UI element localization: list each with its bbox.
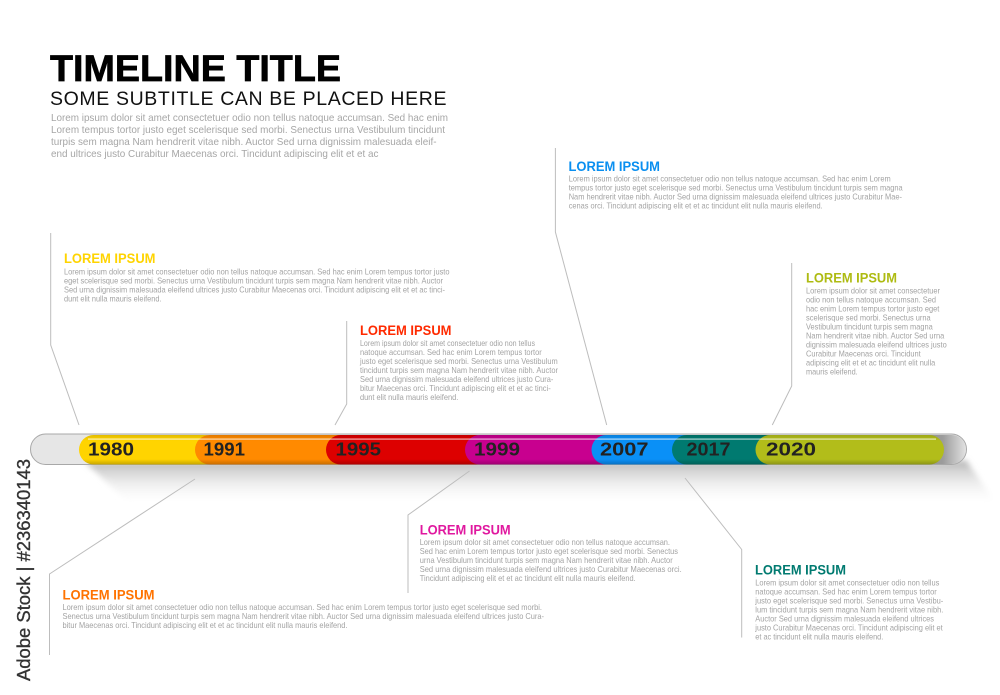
text panel: 1995 xyxy=(359,323,558,402)
text panel: 1995: tincidunt turpis sem magna Nam hendrerit vitae nibh. Auctor xyxy=(360,365,558,375)
text panel: 2020: hac enim Lorem tempus tortor justo eget xyxy=(806,304,940,314)
text panel: 1999: urna Vestibulum tincidunt turpis sem magna Nam hendrerit vitae nibh. Auctor xyxy=(420,555,673,565)
year: 1991: 1991 xyxy=(204,439,245,460)
year: 1999: 1999 xyxy=(474,439,520,460)
text panel: 2007: tempus tortor justo eget scelerisque sed morbi. Senectus urna Vestibulum tincidunt turpis sem magna xyxy=(569,183,903,193)
text panel: 1980: Sed urna dignissim malesuada eleifend ultrices justo Curabitur Maecenas orci. Tincidunt adipiscing elit et et ac tinci- xyxy=(64,284,445,294)
text panel: 2020 xyxy=(806,271,947,377)
connector: 1980 xyxy=(51,233,79,425)
text panel: 2017: et ac tincidunt elit nulla mauris eleifend. xyxy=(755,631,883,641)
text panel: 1980: eget scelerisque sed morbi. Senectus urna Vestibulum tincidunt turpis sem magna Nam hendrerit vitae nibh. Auctor xyxy=(64,275,443,285)
text panel: 2020: Nam hendrerit vitae nibh. Auctor Sed urna xyxy=(806,331,945,341)
connector: 2007 xyxy=(555,148,607,425)
text panel: 1999: Sed hac enim Lorem tempus tortor justo eget scelerisque sed morbi. Senectus xyxy=(420,546,678,556)
bar track xyxy=(30,434,966,464)
text panel: 1991: bitur Maecenas orci. Tincidunt adipiscing elit et et ac tincidunt elit nulla mauris eleifend. xyxy=(62,620,348,630)
text panel: 1995: dunt elit nulla mauris eleifend. xyxy=(360,392,458,402)
text panel: 1995: bitur Maecenas orci. Tincidunt adipiscing elit et et ac tinci- xyxy=(360,383,551,393)
segment: 2017 xyxy=(672,435,782,464)
bar end shading xyxy=(920,435,966,464)
text panel: 1980: LOREM IPSUM xyxy=(64,251,156,266)
segment: 2020 xyxy=(756,435,944,464)
title: TIMELINE TITLE xyxy=(50,47,341,89)
bar highlight xyxy=(88,438,936,440)
text panel: 2007: Nam hendrerit vitae nibh. Auctor Sed urna dignissim malesuada eleifend ultrices justo Curabitur Mae- xyxy=(569,192,902,202)
text panel: 1980: dunt elit nulla mauris eleifend. xyxy=(64,293,162,303)
text panel: 1995: natoque accumsan. Sed hac enim Lorem tempus tortor xyxy=(360,347,542,357)
connector: 1995 xyxy=(335,321,347,425)
timeline shadow xyxy=(85,460,995,502)
connector: 2020 xyxy=(772,263,792,425)
timeline bar xyxy=(30,434,966,464)
text panel: 2017: Auctor Sed urna dignissim malesuada eleifend ultrices xyxy=(755,613,934,623)
year: 1980: 1980 xyxy=(88,439,134,460)
text panel: 2007 xyxy=(568,159,903,211)
bar gloss xyxy=(79,435,944,464)
text panel: 1999 xyxy=(420,522,682,583)
text panel: 2017: justo eget scelerisque sed morbi. Senectus urna Vestibu- xyxy=(754,595,943,605)
text panel: 1980: Lorem ipsum dolor sit amet consectetuer odio non tellus natoque accumsan. Sed hac enim Lorem tempus tortor justo xyxy=(64,266,450,276)
text panel: 1999: Sed urna dignissim malesuada eleifend ultrices justo Curabitur Maecenas orci. xyxy=(420,564,682,574)
intro text block xyxy=(51,113,448,160)
text panel: 2020: Lorem ipsum dolor sit amet consectetuer xyxy=(806,286,940,296)
intro text block: turpis sem magna Nam hendrerit vitae nibh. Auctor Sed urna dignissim malesuada eleif- xyxy=(51,137,436,148)
text panel: 2007: Lorem ipsum dolor sit amet consectetuer odio non tellus natoque accumsan. Sed hac enim Lorem xyxy=(569,174,891,184)
text panel: 2017: justo Curabitur Maecenas orci. Tincidunt adipiscing elit et xyxy=(754,622,943,632)
subtitle: SOME SUBTITLE CAN BE PLACED HERE xyxy=(50,88,446,110)
text panel: 2017: natoque accumsan. Sed hac enim Lorem tempus tortor xyxy=(755,586,937,596)
text panel: 2020: LOREM IPSUM xyxy=(806,271,897,286)
text panel: 1999: LOREM IPSUM xyxy=(420,522,511,537)
text panel: 2017 xyxy=(754,562,943,641)
text panel: 2020: Vestibulum tincidunt turpis sem magna xyxy=(806,322,933,332)
segment: 1991 xyxy=(195,435,355,464)
connector: 1991 xyxy=(50,479,195,655)
text panel: 2020: adipiscing elit et et ac tincidunt elit nulla xyxy=(806,358,936,368)
text panel: 2017: lum tincidunt turpis sem magna Nam hendrerit vitae nibh. xyxy=(755,604,943,614)
year: 2017: 2017 xyxy=(686,439,730,460)
intro text block: end ultrices justo Curabitur Maecenas orci. Tincidunt adipiscing elit et et ac xyxy=(51,149,378,160)
text panel: 1991: Senectus urna Vestibulum tincidunt turpis sem magna Nam hendrerit vitae nibh. Auctor Sed urna dignissim malesuada eleifend ultrices justo Cura- xyxy=(62,611,544,621)
connector: 2017 xyxy=(685,478,742,638)
text panel: 2020: Curabitur Maecenas orci. Tincidunt xyxy=(806,349,921,359)
segment: 1980 xyxy=(79,435,219,464)
text panel: 1995: Sed urna dignissim malesuada eleifend ultrices justo Cura- xyxy=(360,374,553,384)
text panel: 2020: scelerisque sed morbi. Senectus urna xyxy=(806,313,931,323)
side credit label: Adobe Stock | #236340143 xyxy=(14,459,34,681)
segment: 1995 xyxy=(326,435,491,464)
segment: 2007 xyxy=(592,435,702,464)
text panel: 1995: Lorem ipsum dolor sit amet consectetuer odio non tellus xyxy=(360,338,535,348)
text panel: 1980 xyxy=(64,251,450,303)
intro text block: Lorem ipsum dolor sit amet consectetuer odio non tellus natoque accumsan. Sed hac enim xyxy=(51,113,448,124)
text panel: 2020: mauris eleifend. xyxy=(806,367,858,377)
year: 2020: 2020 xyxy=(766,439,816,460)
intro text block: Lorem tempus tortor justo eget scelerisque sed morbi. Senectus urna Vestibulum tincidunt xyxy=(51,125,445,136)
text panel: 1999: Tincidunt adipiscing elit et et ac tincidunt elit nulla mauris eleifend. xyxy=(420,573,636,583)
text panel: 2007: cenas orci. Tincidunt adipiscing elit et et ac tincidunt elit nulla mauris eleifend. xyxy=(569,201,823,211)
text panel: 1999: Lorem ipsum dolor sit amet consectetuer odio non tellus natoque accumsan. xyxy=(420,537,670,547)
text panel: 2020: odio non tellus natoque accumsan. Sed xyxy=(806,295,936,305)
text panel: 1991 xyxy=(62,587,544,630)
text panel: 1995: justo eget scelerisque sed morbi. Senectus urna Vestibulum xyxy=(359,356,558,366)
year: 2007: 2007 xyxy=(600,439,648,460)
year: 1995: 1995 xyxy=(336,439,381,460)
segment: 1999 xyxy=(465,435,620,464)
connector: 1999 xyxy=(408,471,470,593)
text panel: 2017: LOREM IPSUM xyxy=(755,562,846,577)
text panel: 1991: LOREM IPSUM xyxy=(62,587,154,602)
text panel: 2020: dignissim malesuada eleifend ultrices justo xyxy=(806,340,947,350)
text panel: 1991: Lorem ipsum dolor sit amet consectetuer odio non tellus natoque accumsan. Sed hac enim Lorem tempus tortor justo eget scelerisque sed morbi. xyxy=(62,602,542,612)
text panel: 2017: Lorem ipsum dolor sit amet consectetuer odio non tellus xyxy=(755,577,939,587)
text panel: 2007: LOREM IPSUM xyxy=(568,159,660,174)
text panel: 1995: LOREM IPSUM xyxy=(360,323,452,338)
